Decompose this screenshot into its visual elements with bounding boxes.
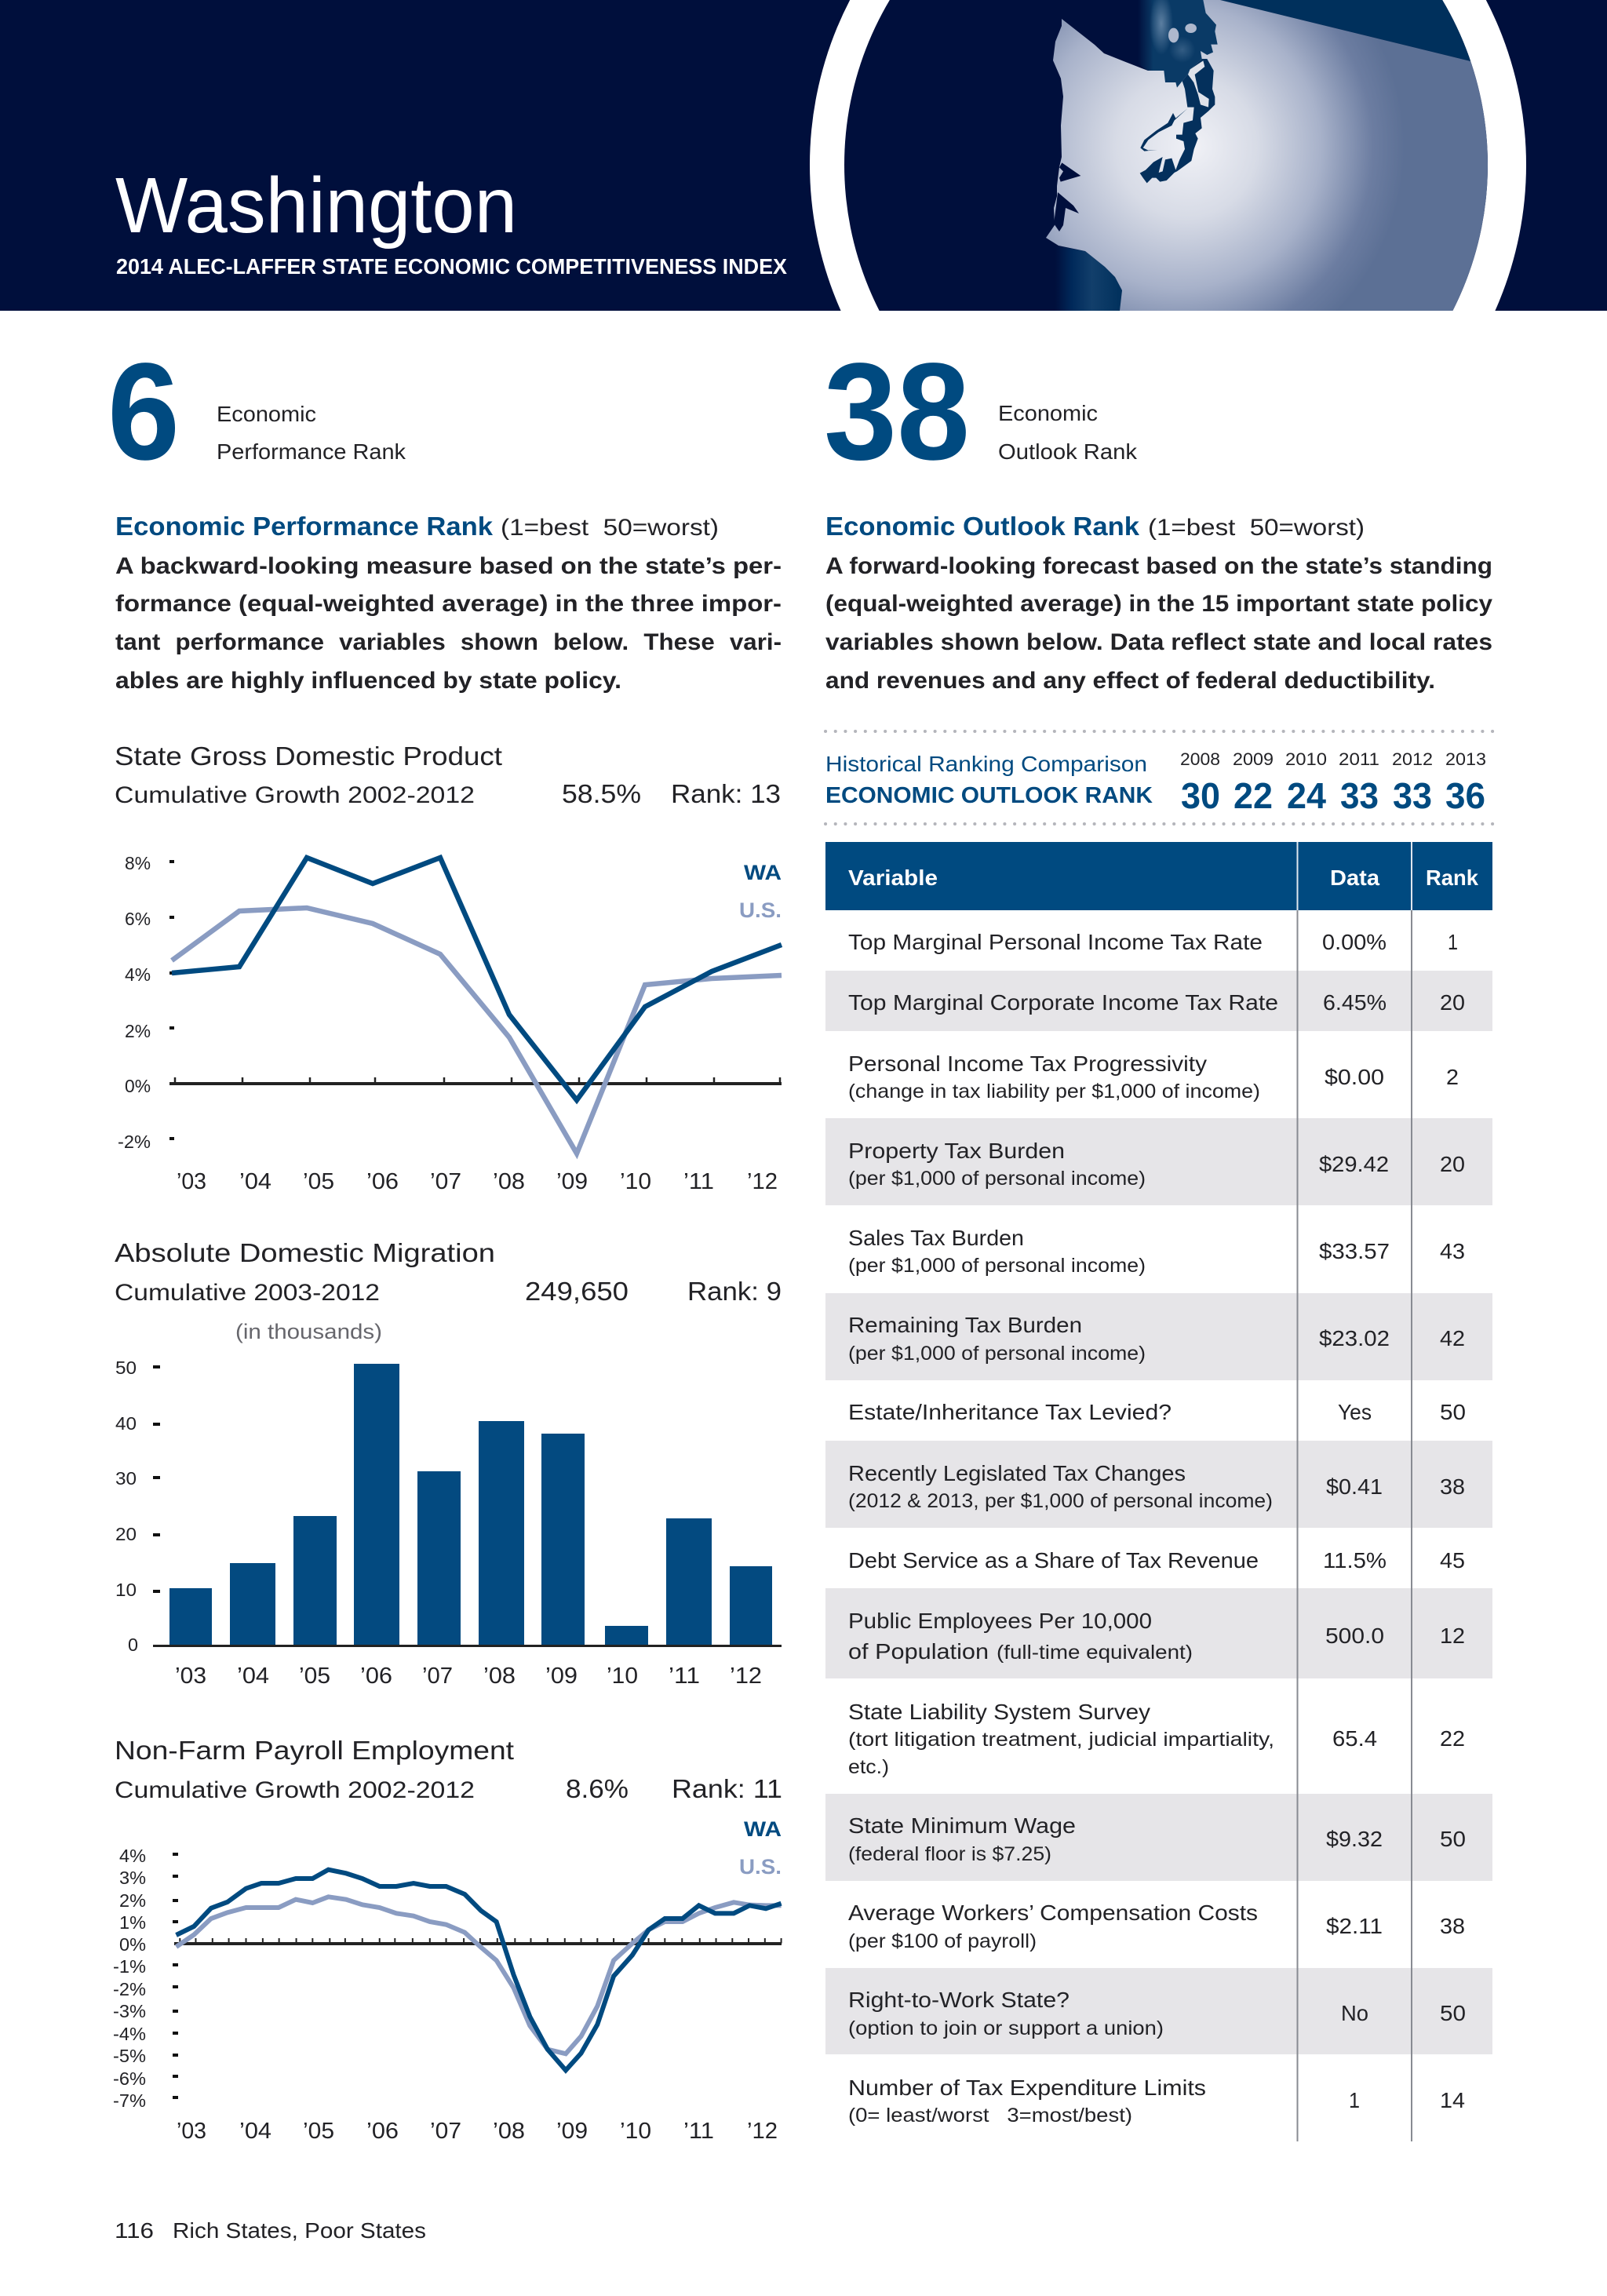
heading: absolute domestic migration xyxy=(115,1238,782,1343)
text block: economic performance rank: ables are highly influenced by state policy. xyxy=(115,668,621,694)
x axis labels: ’05 xyxy=(303,1169,334,1194)
y axis labels: -3% xyxy=(113,2001,146,2021)
x axis labels: ’11 xyxy=(669,1664,700,1689)
heading: non-farm payroll employment: 8.6% xyxy=(566,1774,629,1803)
text block: economic outlook rank: Economic Outlook Rank xyxy=(825,512,1140,541)
row: remaining tax burden: 42 xyxy=(1440,1326,1465,1350)
row: estate/inheritance tax levied: Yes xyxy=(1338,1400,1372,1424)
table: outlook variables xyxy=(825,842,1492,2141)
row: sales tax burden: Sales Tax Burden xyxy=(848,1226,1024,1250)
legend xyxy=(739,861,782,922)
heading: absolute domestic migration: Rank: 9 xyxy=(687,1277,782,1306)
legend xyxy=(739,1817,782,1879)
row: top marginal personal income tax rate: Top Marginal Personal Income Tax Rate xyxy=(848,930,1263,954)
text block: economic outlook rank: variables shown below. Data reflect state and local rates xyxy=(825,629,1492,655)
line: U.S. xyxy=(172,908,782,1153)
subtitle: 2014 ALEC-LAFFER STATE ECONOMIC COMPETITIVENESS INDEX xyxy=(116,254,787,279)
heading: absolute domestic migration: Cumulative 2003-2012 xyxy=(115,1280,380,1306)
x axis labels: ’06 xyxy=(366,1169,399,1194)
rank: economic performance: Performance Rank xyxy=(217,439,406,464)
header banner xyxy=(0,0,1607,311)
row: estate/inheritance tax levied xyxy=(848,1400,1466,1424)
y axis labels: 20 xyxy=(115,1524,137,1544)
row: public employees: Public Employees Per 10,000 xyxy=(848,1609,1152,1633)
y axis labels: -1% xyxy=(113,1956,146,1977)
row: estate/inheritance tax levied: 50 xyxy=(1440,1400,1466,1424)
row: property tax burden: 20 xyxy=(1440,1152,1465,1176)
years: 2010 xyxy=(1285,749,1327,769)
text block: economic outlook rank: and revenues and any effect of federal deductibility. xyxy=(825,668,1435,694)
y axis labels: 1% xyxy=(119,1912,146,1933)
x axis labels: ’06 xyxy=(360,1664,392,1689)
row: recently legislated tax changes: 38 xyxy=(1440,1474,1465,1499)
y axis labels xyxy=(115,1358,138,1655)
y axis labels: -5% xyxy=(113,2046,146,2066)
footer: 116 xyxy=(115,2218,154,2243)
ranks: 36 xyxy=(1445,775,1485,816)
x axis labels: ’04 xyxy=(239,2119,271,2144)
ranks: 33 xyxy=(1393,775,1432,816)
row: public employees: (full-time equivalent) xyxy=(997,1642,1193,1664)
row shading xyxy=(825,971,1492,2054)
x axis labels: ’07 xyxy=(430,2119,461,2144)
row: recently legislated tax changes xyxy=(848,1461,1465,1512)
x axis labels: ’08 xyxy=(483,1664,516,1689)
y axis labels xyxy=(118,853,151,1152)
rank number 38: 38 xyxy=(824,335,970,489)
y axis labels: 6% xyxy=(125,909,151,929)
row: state liability system survey: etc.) xyxy=(848,1756,889,1778)
text block: economic performance rank: Economic Performance Rank xyxy=(115,512,494,541)
heading: state gross domestic product: Cumulative Growth 2002-2012 xyxy=(115,782,475,808)
row: property tax burden: $29.42 xyxy=(1319,1152,1389,1176)
x axis labels: ’12 xyxy=(730,1664,762,1689)
bar chart: domestic migration xyxy=(115,1358,782,1689)
years xyxy=(1180,749,1486,769)
rank label: Economic xyxy=(217,402,316,426)
y axis labels xyxy=(113,1846,146,2111)
heading: state gross domestic product: 58.5% xyxy=(562,779,641,808)
legend: WA xyxy=(744,1817,782,1841)
x axis labels: ’04 xyxy=(237,1664,269,1689)
years: 2008 xyxy=(1180,749,1220,769)
table header xyxy=(825,842,1492,910)
row: state minimum wage: (federal floor is $7.25) xyxy=(848,1843,1051,1865)
row: top marginal personal income tax rate: 1 xyxy=(1448,930,1458,954)
x axis labels: ’08 xyxy=(493,2119,525,2144)
table header: Rank xyxy=(1426,866,1478,890)
heading: absolute domestic migration: (in thousands) xyxy=(235,1320,382,1343)
y axis labels: 40 xyxy=(115,1413,137,1434)
row: state liability system survey: 22 xyxy=(1440,1726,1465,1751)
y axis labels: 30 xyxy=(115,1468,137,1489)
heading: absolute domestic migration: Absolute Domestic Migration xyxy=(115,1238,495,1267)
row: right-to-work state: 50 xyxy=(1440,2001,1466,2025)
line chart: non-farm payroll employment xyxy=(113,1817,782,2144)
rank: economic outlook xyxy=(824,335,1138,489)
row: personal income tax progressivity: $0.00 xyxy=(1325,1065,1384,1089)
row: right-to-work state: No xyxy=(1341,2001,1368,2025)
footer: Rich States, Poor States xyxy=(173,2218,426,2243)
years: 2012 xyxy=(1392,749,1433,769)
row: state liability system survey: (tort litigation treatment, judicial impartiality, xyxy=(848,1729,1274,1751)
row: workers compensation: (per $100 of payroll) xyxy=(848,1930,1037,1952)
heading: non-farm payroll employment: Non-Farm Payroll Employment xyxy=(115,1736,514,1765)
y axis labels: 3% xyxy=(119,1868,146,1888)
y axis labels: 0% xyxy=(125,1076,151,1096)
y axis labels: 4% xyxy=(119,1846,146,1866)
heading: state gross domestic product: State Gross Domestic Product xyxy=(115,742,502,771)
row: right-to-work state: (option to join or support a union) xyxy=(848,2017,1164,2039)
text block: economic outlook rank: (1=best 50=worst) xyxy=(1148,515,1365,541)
legend: WA xyxy=(744,861,782,884)
y axis labels: -2% xyxy=(118,1132,151,1152)
line: WA xyxy=(172,858,782,1100)
text block: economic performance rank: (1=best 50=worst) xyxy=(501,515,719,541)
text block: economic performance rank: A backward-looking measure based on the state’s per- xyxy=(115,553,782,579)
row: sales tax burden xyxy=(848,1226,1465,1277)
heading: state gross domestic product: Rank: 13 xyxy=(671,779,781,808)
row: top marginal corporate income tax rate xyxy=(848,990,1465,1015)
heading: non-farm payroll employment: Cumulative Growth 2002-2012 xyxy=(115,1777,475,1803)
row: top marginal corporate income tax rate: 6.45% xyxy=(1323,990,1387,1015)
line: U.S. xyxy=(177,1897,782,2054)
x axis labels: ’04 xyxy=(239,1169,271,1194)
row: tax expenditure limits xyxy=(848,2076,1465,2127)
x axis labels: ’07 xyxy=(422,1664,453,1689)
x axis labels: ’05 xyxy=(299,1664,330,1689)
text block: economic outlook rank: (equal-weighted average) in the 15 important state policy xyxy=(825,591,1492,617)
y axis labels: 2% xyxy=(119,1890,146,1911)
table header: Variable xyxy=(848,866,938,890)
ranks: 22 xyxy=(1233,775,1273,816)
heading: state gross domestic product xyxy=(115,742,781,808)
map medallion: Washington state xyxy=(810,0,1526,311)
row: top marginal corporate income tax rate: 20 xyxy=(1440,990,1465,1015)
row: public employees: 12 xyxy=(1440,1624,1465,1648)
heading: absolute domestic migration: 249,650 xyxy=(525,1277,629,1306)
row: top marginal personal income tax rate: 0.00% xyxy=(1322,930,1387,954)
x axis labels: ’06 xyxy=(366,2119,399,2144)
row: personal income tax progressivity: (change in tax liability per $1,000 of income) xyxy=(848,1081,1260,1102)
row: top marginal personal income tax rate xyxy=(848,930,1458,954)
x axis labels: ’09 xyxy=(556,2119,588,2144)
bars xyxy=(169,1364,772,1645)
row: right-to-work state: Right-to-Work State? xyxy=(848,1988,1070,2012)
row: state minimum wage xyxy=(848,1813,1466,1865)
row: tax expenditure limits: (0= least/worst 3=most/best) xyxy=(848,2105,1132,2127)
row: recently legislated tax changes: (2012 & 2013, per $1,000 of personal income) xyxy=(848,1490,1273,1512)
row: state liability system survey: State Liability System Survey xyxy=(848,1700,1150,1724)
y axis labels: 10 xyxy=(115,1580,137,1600)
row: remaining tax burden: (per $1,000 of personal income) xyxy=(848,1343,1146,1365)
x axis labels: ’11 xyxy=(683,1169,714,1194)
y axis labels: -2% xyxy=(113,1979,146,1999)
row: tax expenditure limits: 1 xyxy=(1349,2088,1360,2112)
y axis labels: 50 xyxy=(115,1358,137,1378)
years: 2011 xyxy=(1339,749,1379,769)
x axis labels xyxy=(175,1664,762,1689)
x axis labels: ’10 xyxy=(607,1664,638,1689)
x axis labels xyxy=(177,1169,778,1194)
row: debt service: 45 xyxy=(1440,1548,1465,1573)
x axis labels: ’10 xyxy=(620,1169,651,1194)
x axis labels: ’03 xyxy=(177,2119,206,2144)
row: right-to-work state xyxy=(848,1988,1466,2039)
row: state liability system survey xyxy=(848,1700,1465,1778)
row: personal income tax progressivity xyxy=(848,1051,1459,1102)
x axis labels: ’11 xyxy=(683,2119,714,2144)
row: top marginal corporate income tax rate: Top Marginal Corporate Income Tax Rate xyxy=(848,990,1278,1015)
row: property tax burden: Property Tax Burden xyxy=(848,1139,1065,1163)
x axis labels xyxy=(177,2119,778,2144)
legend: U.S. xyxy=(739,898,782,922)
y axis labels: 2% xyxy=(125,1021,151,1041)
ranks: 24 xyxy=(1287,775,1326,816)
row: state minimum wage: 50 xyxy=(1440,1827,1466,1851)
row: state minimum wage: State Minimum Wage xyxy=(848,1813,1076,1838)
row: remaining tax burden: $23.02 xyxy=(1319,1326,1390,1350)
row: sales tax burden: 43 xyxy=(1440,1239,1465,1263)
labels: Historical Ranking Comparison xyxy=(825,752,1147,776)
line: WA xyxy=(177,1870,782,2070)
row: personal income tax progressivity: Personal Income Tax Progressivity xyxy=(848,1051,1207,1076)
row: public employees xyxy=(848,1609,1465,1664)
row: sales tax burden: $33.57 xyxy=(1319,1239,1390,1263)
row: recently legislated tax changes: $0.41 xyxy=(1326,1474,1383,1499)
title: Washington xyxy=(115,162,517,250)
row: remaining tax burden: Remaining Tax Burden xyxy=(848,1313,1082,1337)
row: state liability system survey: 65.4 xyxy=(1332,1726,1377,1751)
years: 2013 xyxy=(1445,749,1486,769)
y axis labels: 4% xyxy=(125,964,151,985)
x axis labels: ’12 xyxy=(747,1169,778,1194)
text block: economic performance rank: tant performance variables shown below. These vari- xyxy=(115,629,782,655)
row: debt service xyxy=(848,1548,1465,1573)
ranks: 33 xyxy=(1340,775,1379,816)
x axis labels: ’08 xyxy=(493,1169,525,1194)
ranks xyxy=(1181,775,1485,816)
row: personal income tax progressivity: 2 xyxy=(1446,1065,1459,1089)
y axis labels: -4% xyxy=(113,2024,146,2044)
row: debt service: 11.5% xyxy=(1323,1548,1387,1573)
row: public employees: of Population xyxy=(848,1639,989,1664)
y axis labels: -7% xyxy=(113,2090,146,2111)
row: property tax burden xyxy=(848,1139,1465,1190)
text block: economic outlook rank: A forward-looking forecast based on the state’s standing xyxy=(825,553,1492,579)
rank number 6: 6 xyxy=(107,335,180,489)
y axis labels: 0 xyxy=(128,1635,138,1655)
row: remaining tax burden xyxy=(848,1313,1465,1365)
row: state minimum wage: $9.32 xyxy=(1326,1827,1383,1851)
heading: non-farm payroll employment: Rank: 11 xyxy=(672,1774,782,1803)
x axis labels: ’09 xyxy=(545,1664,578,1689)
years: 2009 xyxy=(1233,749,1274,769)
x axis labels: ’10 xyxy=(620,2119,651,2144)
row: workers compensation: $2.11 xyxy=(1326,1914,1383,1938)
x axis labels: ’03 xyxy=(175,1664,206,1689)
x axis labels: ’12 xyxy=(747,2119,778,2144)
x axis labels: ’07 xyxy=(430,1169,461,1194)
table header: Data xyxy=(1330,866,1379,890)
rank: economic outlook: Outlook Rank xyxy=(998,439,1138,464)
row: tax expenditure limits: 14 xyxy=(1440,2088,1465,2112)
row: sales tax burden: (per $1,000 of personal income) xyxy=(848,1255,1146,1277)
line chart: state GDP growth xyxy=(118,853,782,1194)
text block: economic performance rank xyxy=(115,512,782,694)
rank label: Economic xyxy=(998,401,1098,425)
legend: U.S. xyxy=(739,1855,782,1879)
row: recently legislated tax changes: Recently Legislated Tax Changes xyxy=(848,1461,1186,1485)
x axis labels: ’05 xyxy=(303,2119,334,2144)
text block: economic outlook rank xyxy=(825,512,1492,694)
row: debt service: Debt Service as a Share of Tax Revenue xyxy=(848,1548,1259,1573)
row: public employees: 500.0 xyxy=(1325,1624,1384,1648)
x axis labels: ’09 xyxy=(556,1169,588,1194)
historical ranking comparison: ECONOMIC OUTLOOK RANK xyxy=(825,783,1153,808)
row: tax expenditure limits: Number of Tax Expenditure Limits xyxy=(848,2076,1206,2100)
row: workers compensation: Average Workers’ Compensation Costs xyxy=(848,1901,1258,1925)
row: workers compensation: 38 xyxy=(1440,1914,1465,1938)
row: estate/inheritance tax levied: Estate/Inheritance Tax Levied? xyxy=(848,1400,1172,1424)
y axis labels: 8% xyxy=(125,853,151,873)
y axis labels: -6% xyxy=(113,2068,146,2089)
ranks: 30 xyxy=(1181,775,1220,816)
row: property tax burden: (per $1,000 of personal income) xyxy=(848,1168,1146,1190)
text block: economic performance rank: formance (equal-weighted average) in the three impor- xyxy=(115,591,782,617)
heading: non-farm payroll employment xyxy=(115,1736,782,1803)
y axis labels: 0% xyxy=(119,1934,146,1955)
x axis labels: ’03 xyxy=(177,1169,206,1194)
rank: economic performance xyxy=(107,335,406,489)
historical ranking comparison xyxy=(825,731,1493,824)
row: workers compensation xyxy=(848,1901,1465,1952)
